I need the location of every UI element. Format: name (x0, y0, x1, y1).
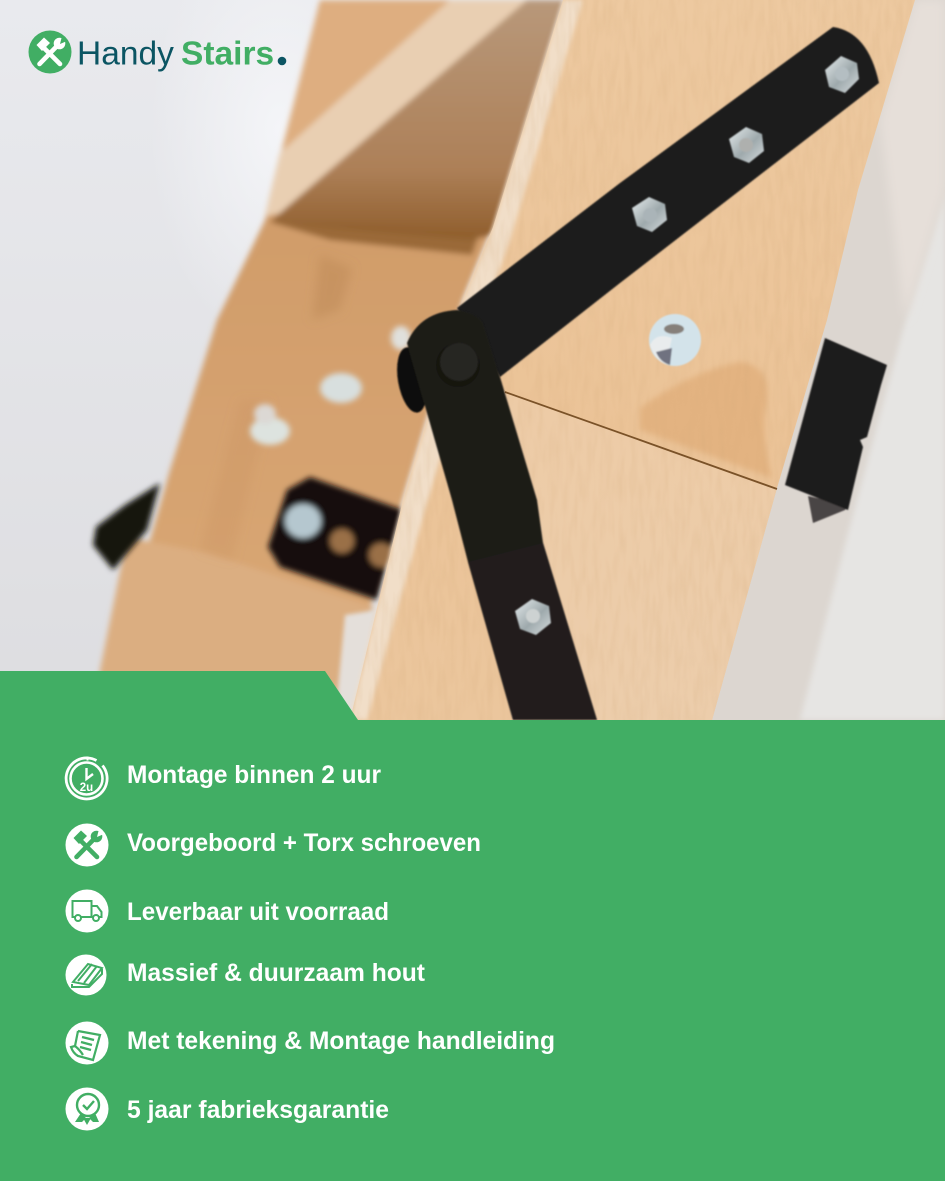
photo: ladder stair hinge (0, 0, 945, 720)
logo: Stairs (181, 36, 274, 72)
icon: hammer and wrench (66, 824, 108, 866)
back bolts (250, 326, 411, 445)
panel: green features (0, 671, 945, 1181)
feature: montage (66, 756, 381, 799)
feature: montage: Montage binnen 2 uur (127, 761, 381, 789)
large round screw (649, 314, 701, 366)
feature: garantie (66, 1088, 389, 1130)
hex bolts (515, 56, 859, 635)
icon: rosette badge (66, 1088, 108, 1130)
lower black strap with hinge (392, 310, 597, 720)
feature: tekening: Met tekening & Montage handleiding (127, 1027, 555, 1055)
upper black strap (457, 27, 879, 377)
feature: garantie: 5 jaar fabrieksgarantie (127, 1096, 389, 1124)
feature: voorgeboord: Voorgeboord + Torx schroeven (127, 829, 481, 857)
back stringer shading (200, 255, 352, 560)
icon: wood planks (66, 954, 106, 996)
icon: delivery truck (66, 890, 108, 932)
white sliver between stringers (335, 610, 376, 720)
right wall (700, 0, 945, 720)
back stringer (98, 0, 565, 720)
front stringer (350, 0, 920, 720)
feature: massief: Massief & duurzaam hout (127, 959, 426, 987)
logo wordmark: Handy (77, 36, 174, 72)
feature: voorgeboord (66, 824, 481, 866)
right black bracket (785, 338, 887, 523)
feature: massief (66, 954, 426, 996)
back black bracket and left hook (93, 477, 403, 600)
icon: logo tools (28, 30, 72, 74)
feature: leverbaar: Leverbaar uit voorraad (127, 898, 389, 926)
icon: document scroll (66, 1022, 108, 1064)
icon: clock 2u: 2u (80, 782, 93, 794)
logo (28, 30, 286, 74)
feature: tekening (66, 1022, 555, 1064)
icon: clock 2u (66, 756, 107, 799)
feature: leverbaar (66, 890, 389, 932)
